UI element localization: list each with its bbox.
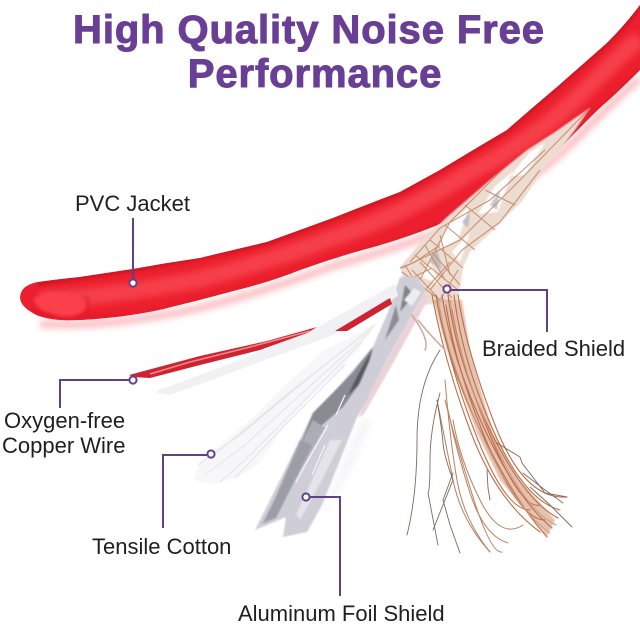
label: Oxygen-free Copper Wire bbox=[2, 376, 137, 458]
copper strands bbox=[407, 295, 572, 553]
label: Braided Shield: Braided Shield bbox=[482, 336, 625, 361]
label: PVC Jacket bbox=[75, 191, 190, 287]
label: Tensile Cotton bbox=[92, 450, 231, 559]
white wire bbox=[157, 284, 398, 395]
tensile cotton bbox=[193, 323, 377, 484]
label: Braided Shield bbox=[443, 285, 625, 361]
red jacket bbox=[0, 0, 640, 340]
label: Oxygen-free Copper Wire: Oxygen-free bbox=[4, 408, 125, 433]
label: Aluminum Foil Shield bbox=[238, 493, 445, 624]
braided shield bbox=[400, 108, 590, 305]
red wire bbox=[129, 298, 392, 378]
label: PVC Jacket: PVC Jacket bbox=[75, 191, 190, 216]
title: Performance bbox=[188, 52, 442, 96]
label: Tensile Cotton: Tensile Cotton bbox=[92, 534, 231, 559]
aluminum foil shield bbox=[255, 276, 430, 537]
label: Oxygen-free Copper Wire: Copper Wire bbox=[2, 433, 125, 458]
title bbox=[73, 8, 545, 96]
title: High Quality Noise Free bbox=[73, 8, 545, 52]
